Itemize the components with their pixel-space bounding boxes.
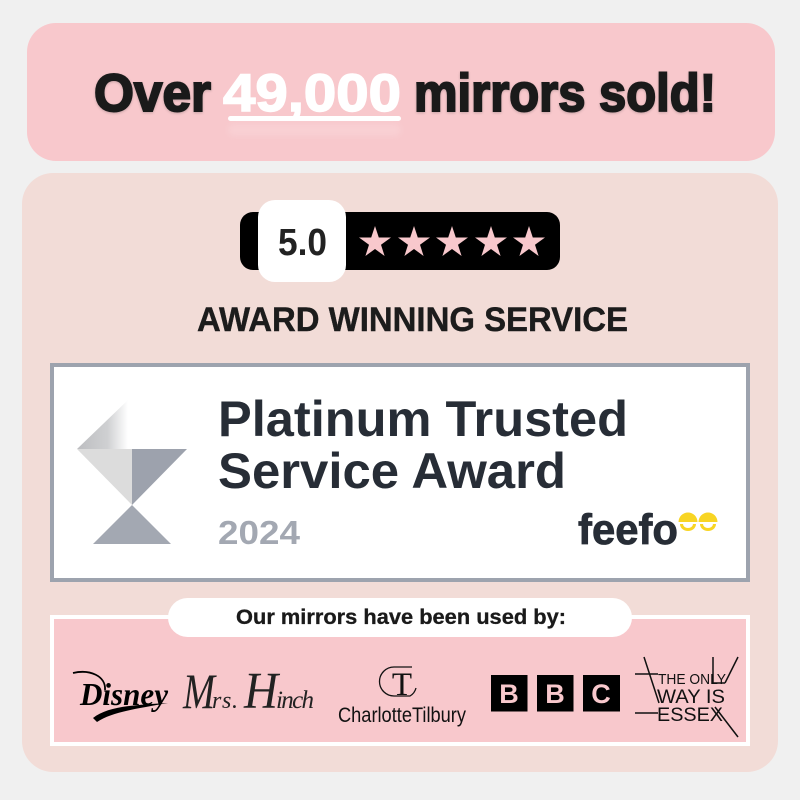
panel: service and endorsements: [22, 173, 778, 772]
award title: [218, 391, 628, 499]
logo: mrs hinch: rs.: [212, 688, 238, 714]
award title: Platinum Trusted: [218, 391, 628, 447]
logo: the only way is essex: WAY IS: [657, 686, 725, 708]
award year: 2024: [218, 514, 301, 551]
logo: mrs hinch: M: [182, 663, 217, 719]
panel: used by brands: [52, 598, 748, 744]
pill heading: our mirrors have been used by: [168, 598, 632, 637]
logo: disney: Disney: [79, 676, 169, 712]
logo: charlotte tilbury: T: [392, 667, 412, 703]
rating badge: [240, 200, 560, 282]
five stars: [359, 226, 545, 256]
headline: over 49,000 mirrors sold: mirrors sold!: [414, 65, 716, 124]
headline: over 49,000 mirrors sold: 49,000: [223, 64, 401, 123]
panel: headline banner: [27, 23, 775, 161]
headline: over 49,000 mirrors sold: Over: [94, 64, 211, 123]
logo: mrs hinch: inch: [276, 687, 314, 714]
logo: the only way is essex: THE ONLY: [658, 671, 726, 688]
logo: the only way is essex: [635, 657, 738, 737]
logo: bbc: B: [499, 679, 519, 709]
headline: over 49,000 mirrors sold: Over: [94, 65, 211, 124]
headline: over 49,000 mirrors sold: mirrors sold!: [414, 64, 716, 123]
logo: charlotte tilbury: CharlotteTilbury: [338, 704, 466, 727]
logo: bbc: C: [591, 679, 611, 709]
logo: bbc: [491, 675, 620, 712]
logo: charlotte tilbury: [338, 667, 466, 727]
award title: Service Award: [218, 443, 566, 499]
logo: disney: [73, 672, 169, 722]
logo: the only way is essex: ESSEX: [657, 704, 723, 726]
panel: platinum award: [52, 365, 748, 580]
heading: award winning service: AWARD WINNING SERVICE: [197, 301, 628, 339]
headline: over 49,000 mirrors sold: [94, 64, 716, 136]
icon: feefo award mark: [77, 400, 187, 544]
logo: feefo: feefo: [578, 506, 678, 554]
rating badge: 5.0: [278, 222, 327, 264]
logo: bbc: B: [545, 679, 565, 709]
logo: mrs hinch: H: [243, 663, 280, 720]
pill heading: our mirrors have been used by: Our mirrors have been used by:: [236, 606, 566, 629]
